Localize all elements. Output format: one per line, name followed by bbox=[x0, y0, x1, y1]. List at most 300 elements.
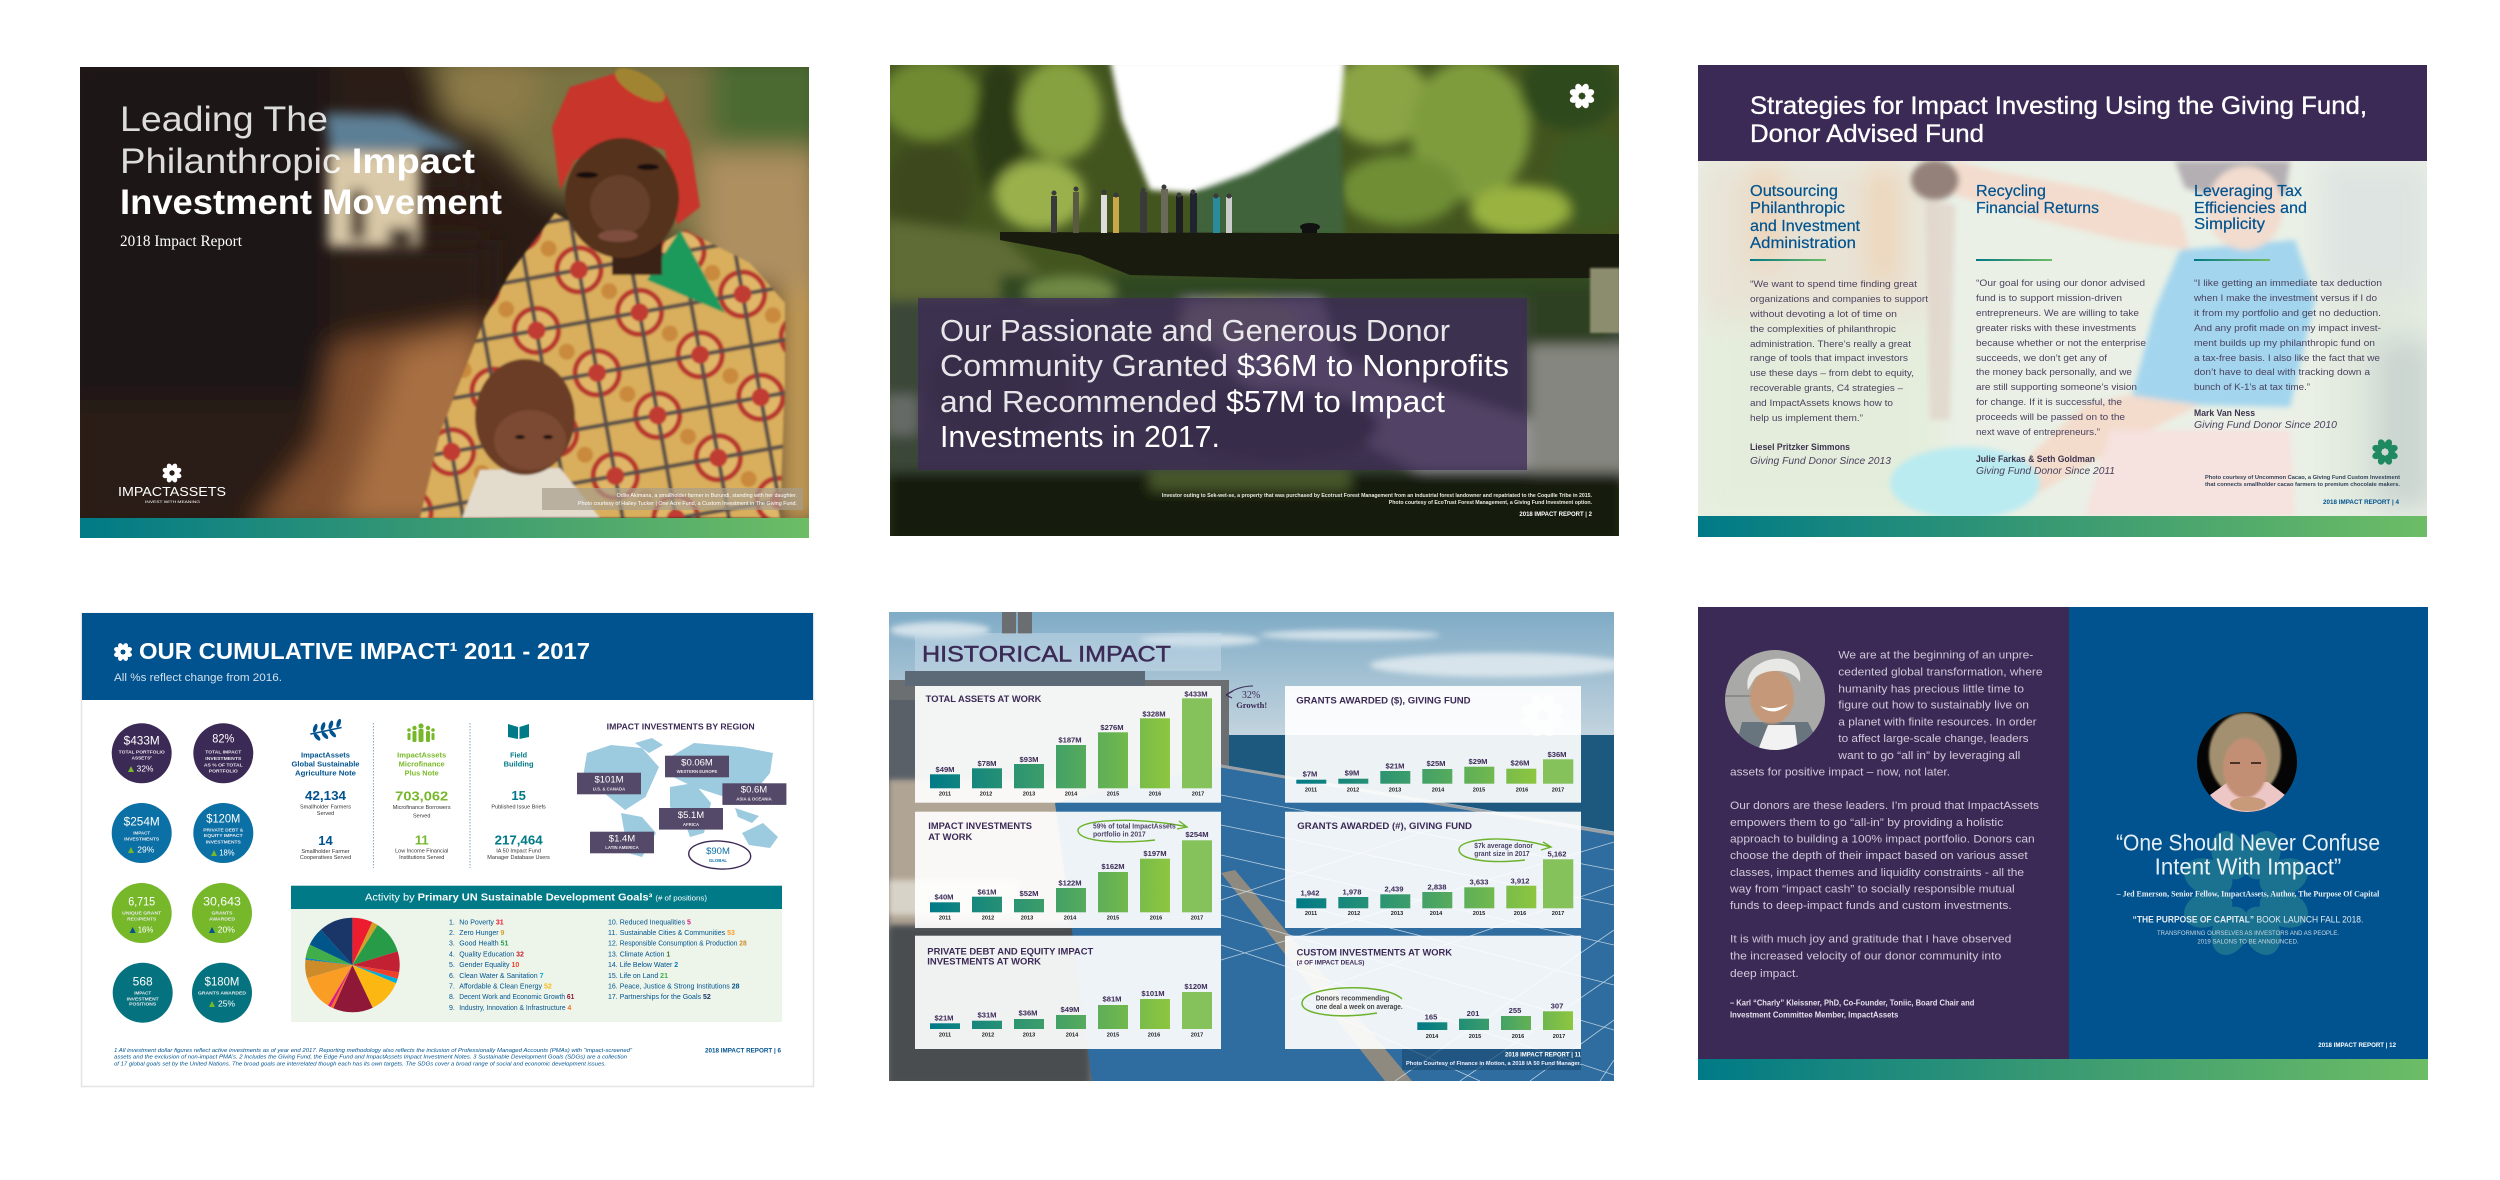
portrait: Karl Kleissner bbox=[1725, 650, 1825, 750]
chart: grants awarded count: 2,838 bbox=[1427, 882, 1447, 891]
chart: custom investments at work: 201 bbox=[1467, 1009, 1480, 1018]
chart: total assets at work bbox=[915, 686, 1221, 803]
callout: 59% of portfolio: portfolio in 2017 bbox=[1093, 832, 1146, 839]
wrap bbox=[420, 213, 785, 518]
cover title: Philanthropic Impact bbox=[120, 142, 475, 181]
region: Latin America: $1.4M bbox=[609, 834, 635, 845]
callout: 32% growth: 32% bbox=[1242, 690, 1260, 701]
letter text: funds to deep-impact funds and custom investments. bbox=[1730, 900, 2012, 912]
purple letter column bbox=[1698, 607, 2069, 1059]
chart: custom investments at work: 2014 bbox=[1426, 1034, 1439, 1040]
chart: custom investments at work: CUSTOM INVESTMENTS AT WORK bbox=[1297, 947, 1453, 957]
page title box: HISTORICAL IMPACT bbox=[922, 642, 1171, 667]
legend: goals 1 to 9: 2. bbox=[449, 930, 455, 937]
stat circle: impact investment positions: POSITIONS bbox=[129, 1002, 156, 1007]
column: outsourcing bbox=[1749, 183, 1928, 467]
footnotes bbox=[114, 1048, 633, 1067]
stat circle: private debt and equity bbox=[193, 803, 253, 863]
page number and photo credit: 2018 IMPACT REPORT | 11 bbox=[1505, 1052, 1582, 1059]
legend: goals 1 to 9 bbox=[449, 919, 574, 1012]
chart: grants awarded count: 2017 bbox=[1552, 911, 1564, 917]
legend: goals 10 to 17: 16. bbox=[608, 984, 618, 990]
letter text: a planet with finite resources. In order bbox=[1838, 716, 2037, 728]
stat circle: grants awarded count: AWARDED bbox=[209, 916, 236, 921]
column: outsourcing: range of tools that impact investors bbox=[1750, 352, 1908, 363]
chart: grants awarded dollars: 2012 bbox=[1347, 787, 1359, 793]
chart: grants awarded dollars: $29M bbox=[1468, 757, 1488, 766]
column: field building: Published Issue Briefs bbox=[491, 804, 546, 810]
chart: grants awarded count: 1,942 bbox=[1300, 888, 1320, 897]
chart: private debt and equity: $81M bbox=[1102, 995, 1122, 1004]
column: agriculture note bbox=[292, 718, 360, 861]
headline box: Our Passionate and Generous Donor bbox=[940, 313, 1450, 348]
column: recycling: entrepreneurs. We are willing to take bbox=[1976, 307, 2139, 318]
chart: grants awarded dollars: $7M bbox=[1303, 770, 1317, 779]
region: Africa: AFRICA bbox=[683, 822, 699, 827]
column: recycling: succeeds, we don’t get any of bbox=[1976, 352, 2107, 363]
chart: grants awarded dollars: $21M bbox=[1386, 761, 1404, 770]
headline box: Investments in 2017. bbox=[940, 419, 1220, 454]
chart: total assets at work: $276M bbox=[1100, 723, 1124, 732]
cover title bbox=[120, 100, 502, 222]
stat circle: unique grant recipients: RECIPIENTS bbox=[127, 916, 156, 921]
chart: impact investments at work: AT WORK bbox=[928, 832, 973, 842]
chart: grants awarded count: 2,439 bbox=[1384, 885, 1404, 894]
chart: custom investments at work: 165 bbox=[1425, 1012, 1438, 1021]
page number: 2018 IMPACT REPORT | 6 bbox=[705, 1048, 782, 1055]
forest and bridge photo bbox=[880, 50, 1630, 547]
stat circle: impact investments: IMPACT bbox=[133, 830, 150, 835]
column: leveraging tax: it from my portfolio and get no deduction. bbox=[2194, 307, 2381, 318]
column: outsourcing: organizations and companies to support bbox=[1750, 293, 1928, 304]
chart: total assets at work: TOTAL ASSETS AT WORK bbox=[926, 694, 1042, 704]
stat circle: grants awarded dollars bbox=[192, 963, 252, 1023]
chart: grants awarded dollars: 2015 bbox=[1473, 787, 1485, 793]
stat circle: grants awarded dollars: 25% bbox=[218, 1000, 235, 1009]
chart: total assets at work: 2016 bbox=[1149, 791, 1161, 797]
legend: goals 1 to 9: Decent Work and Economic Growth 61 bbox=[459, 994, 574, 1001]
chart: grants awarded count: 2014 bbox=[1430, 911, 1443, 917]
column: field building: Manager Database Users bbox=[487, 855, 550, 861]
photo caption bbox=[1162, 493, 1593, 506]
column: leveraging tax: when I make the investment versus if I do bbox=[2193, 292, 2377, 303]
chart: grants awarded dollars: $36M bbox=[1548, 750, 1566, 759]
page title box bbox=[915, 633, 1221, 671]
legend: goals 1 to 9: Affordable & Clean Energy 52 bbox=[459, 984, 552, 990]
chart: private debt and equity: 2013 bbox=[1023, 1032, 1035, 1038]
stat circle: unique grant recipients: 16% bbox=[138, 925, 153, 934]
chart: total assets at work: $187M bbox=[1058, 736, 1082, 745]
panel: strategies page bbox=[1698, 65, 2435, 537]
column: microfinance note: Microfinance Borrowers bbox=[393, 805, 451, 811]
stat circle: grants awarded dollars: $180M bbox=[205, 977, 239, 989]
chart: private debt and equity bbox=[915, 936, 1221, 1049]
chart: impact investments at work: $40M bbox=[934, 893, 954, 902]
stat circle: private debt and equity: EQUITY IMPACT bbox=[204, 833, 243, 838]
chart: total assets at work: 2015 bbox=[1107, 791, 1119, 797]
header band bbox=[1698, 65, 2427, 161]
stat circle: total portfolio assets: ASSETS² bbox=[132, 756, 152, 761]
legend: goals 1 to 9: Quality Education 32 bbox=[459, 951, 524, 958]
legend: goals 1 to 9: 3. bbox=[449, 941, 455, 948]
footnotes: 1 All investment dollar figures reflect active investments as of year end 2017. Reporting methodology also reflects the inclusion of Professionally Managed Accounts (PMAs) with “impact-screened” bbox=[114, 1048, 633, 1054]
gradient band bbox=[1698, 516, 2427, 537]
region: Global: GLOBAL bbox=[709, 858, 727, 863]
subheading: All %s reflect change from 2016. bbox=[114, 672, 282, 684]
column: field building: 15 bbox=[511, 788, 526, 803]
column: leveraging tax: don’t have to deal with tracking down a bbox=[2194, 366, 2371, 377]
chart: impact investments at work: $197M bbox=[1143, 849, 1167, 858]
chart: private debt and equity: 2015 bbox=[1107, 1032, 1119, 1038]
column: field building: 217,464 bbox=[495, 833, 543, 848]
gradient band bbox=[1698, 1059, 2428, 1080]
column: recycling: Julie Farkas & Seth Goldman bbox=[1976, 453, 2095, 464]
chart: private debt and equity: PRIVATE DEBT AND EQUITY IMPACT bbox=[927, 947, 1094, 957]
column: outsourcing: “We want to spend time finding great bbox=[1750, 278, 1917, 289]
legend: goals 10 to 17: Climate Action 1 bbox=[620, 951, 670, 958]
legend: goals 1 to 9: 6. bbox=[449, 973, 455, 980]
region: Western Europe bbox=[665, 756, 729, 777]
region: Asia and Oceania bbox=[722, 783, 786, 805]
column: outsourcing: Philanthropic bbox=[1750, 200, 1845, 217]
baby bbox=[462, 468, 600, 518]
letter text bbox=[1729, 650, 2043, 980]
page number and photo credit: Photo Courtesy of Finance in Motion, a 2018 IA 50 Fund Manager. bbox=[1406, 1061, 1582, 1067]
legend: goals 1 to 9: 8. bbox=[449, 994, 455, 1001]
chart: grants awarded dollars bbox=[1285, 686, 1581, 803]
chart: grants awarded dollars: $9M bbox=[1345, 768, 1359, 777]
stat circle: impact share: TOTAL IMPACT bbox=[205, 749, 241, 754]
region: Global bbox=[688, 839, 751, 871]
letter text: It is with much joy and gratitude that I have observed bbox=[1730, 934, 2011, 946]
column: leveraging tax: Efficiencies and bbox=[2194, 200, 2307, 217]
legend: goals 10 to 17: Peace, Justice & Strong Institutions 28 bbox=[620, 984, 740, 990]
column: outsourcing: help us implement them.” bbox=[1750, 412, 1863, 423]
letter text: the increased velocity of our donor community into bbox=[1730, 950, 2001, 962]
column: outsourcing: Liesel Pritzker Simmons bbox=[1750, 441, 1850, 452]
chart: impact investments at work: 2015 bbox=[1107, 915, 1119, 921]
blue quote column bbox=[2069, 607, 2428, 1059]
washed background photo bbox=[1698, 160, 2435, 520]
column: recycling: Recycling bbox=[1976, 183, 2046, 200]
letter text: Our donors are these leaders. I’m proud that ImpactAssets bbox=[1730, 800, 2040, 812]
book launch note: 2019 SALONS TO BE ANNOUNCED. bbox=[2197, 939, 2299, 945]
region: Africa bbox=[659, 808, 723, 830]
stat circle: unique grant recipients bbox=[112, 883, 172, 943]
icon: wheat sprig bbox=[308, 718, 345, 743]
logo: ImpactAssets bbox=[118, 463, 226, 504]
stat circle: grants awarded count bbox=[192, 883, 252, 943]
chart: grants awarded dollars: 2016 bbox=[1516, 787, 1528, 793]
chart: grants awarded dollars: 2013 bbox=[1389, 787, 1401, 793]
chart: grants awarded count: GRANTS AWARDED (#), GIVING FUND bbox=[1297, 821, 1473, 831]
letter text: We are at the beginning of an unpre- bbox=[1838, 650, 2034, 662]
page number: 2018 IMPACT REPORT | 4 bbox=[2323, 499, 2400, 506]
chart: private debt and equity: $120M bbox=[1184, 982, 1208, 991]
legend: goals 1 to 9: Gender Equality 10 bbox=[459, 962, 519, 969]
legend: goals 10 to 17: 14. bbox=[608, 962, 618, 969]
page number and photo credit bbox=[1402, 1049, 1582, 1070]
footnotes: assets and the exclusion of non-impact PMA’s. 2 Includes the Giving Fund, the Edge Fund and ImpactAssets Impact Investment Notes. 3 Sustainable Development Goals (SDGs) are a collection bbox=[114, 1055, 627, 1061]
stat circle: impact share: INVESTMENTS bbox=[205, 756, 241, 761]
column: leveraging tax: Leveraging Tax bbox=[2194, 183, 2302, 200]
letter text: classes, impact themes and liquidity constraints - all the bbox=[1730, 867, 2024, 879]
SDG heading: Activity by Primary UN Sustainable Development Goals³ (# of positions) bbox=[365, 892, 708, 904]
logo flower bbox=[1569, 83, 1595, 109]
heading: Donor Advised Fund bbox=[1750, 120, 1984, 148]
legend: goals 1 to 9: Good Health 51 bbox=[459, 941, 508, 948]
column: leveraging tax: Simplicity bbox=[2194, 216, 2265, 233]
chart: grants awarded count: 2011 bbox=[1305, 911, 1317, 917]
chart: grants awarded dollars: GRANTS AWARDED ($), GIVING FUND bbox=[1296, 695, 1471, 705]
column: leveraging tax: Giving Fund Donor Since 2010 bbox=[2194, 419, 2337, 431]
callout: 32% growth bbox=[1226, 686, 1267, 710]
stat circle: impact share: AS % OF TOTAL bbox=[204, 762, 243, 767]
column: microfinance note: Institutions Served bbox=[399, 855, 444, 861]
headline box bbox=[918, 298, 1527, 470]
legend: goals 1 to 9: 9. bbox=[449, 1005, 455, 1012]
page number: 2018 IMPACT REPORT | 12 bbox=[2318, 1042, 2397, 1049]
cover title: Leading The bbox=[120, 100, 328, 139]
chart: impact investments at work: 2017 bbox=[1191, 915, 1203, 921]
signature: – Karl “Charly” Kleissner, PhD, Co-Founder, Toniic, Board Chair and bbox=[1730, 998, 1974, 1008]
pie chart bbox=[305, 918, 400, 1012]
chart: private debt and equity: 2017 bbox=[1191, 1032, 1203, 1038]
chart: custom investments at work: 2015 bbox=[1469, 1034, 1481, 1040]
region: Asia and Oceania: $0.6M bbox=[741, 785, 767, 796]
panel: letter and quote page bbox=[1698, 607, 2428, 1080]
chart: total assets at work: 2013 bbox=[1023, 791, 1035, 797]
legend: goals 1 to 9: Zero Hunger 9 bbox=[459, 930, 505, 937]
legend: goals 10 to 17: 10. bbox=[608, 919, 618, 926]
photo caption bbox=[2205, 475, 2401, 488]
stat circle: grants awarded dollars: GRANTS AWARDED bbox=[198, 990, 247, 995]
icon: open book bbox=[508, 724, 518, 739]
column: recycling: fund is to support mission-driven bbox=[1976, 292, 2122, 303]
column: agriculture note: Cooperatives Served bbox=[300, 855, 351, 861]
letter text: way from “impact cash” to socially responsible mutual bbox=[1729, 884, 2015, 896]
letter text: choose the depth of their impact based on various asset bbox=[1730, 850, 2028, 862]
column: leveraging tax: a tax-free basis. I also like the fact that we bbox=[2194, 352, 2380, 363]
solar panel photo bbox=[889, 612, 1630, 1085]
column: outsourcing: use these days – from debt to equity, bbox=[1750, 367, 1914, 378]
page number: 2018 IMPACT REPORT | 2 bbox=[1519, 512, 1593, 518]
legend: goals 10 to 17: 12. bbox=[608, 941, 618, 948]
chart: grants awarded dollars: $25M bbox=[1426, 759, 1446, 768]
callout: one deal a week bbox=[1302, 988, 1403, 1016]
chart: impact investments at work: 2013 bbox=[1021, 915, 1033, 921]
map: impact investments by region bbox=[577, 722, 786, 871]
photo caption bbox=[542, 488, 803, 510]
column: outsourcing: recoverable grants, C4 strategies – bbox=[1750, 382, 1904, 393]
region: Latin America: LATIN AMERICA bbox=[605, 845, 639, 850]
map: impact investments by region: IMPACT INVESTMENTS BY REGION bbox=[607, 722, 755, 731]
stat circle: grants awarded count: 30,643 bbox=[203, 897, 241, 909]
callout: one deal a week: Donors recommending bbox=[1316, 994, 1390, 1003]
column: agriculture note: Smallholder Farmer bbox=[301, 849, 350, 855]
chart: grants awarded count: 1,978 bbox=[1342, 888, 1362, 897]
icon: people bbox=[407, 723, 435, 742]
chart: impact investments at work: 2016 bbox=[1150, 915, 1162, 921]
chart: private debt and equity: INVESTMENTS AT WORK bbox=[927, 957, 1042, 967]
stat circle: private debt and equity: INVESTMENTS bbox=[206, 839, 241, 844]
attribution: – Jed Emerson, Senior Fellow, ImpactAssets, Author, The Purpose Of Capital bbox=[2116, 888, 2380, 898]
chart: grants awarded dollars: 2017 bbox=[1552, 787, 1564, 793]
column: agriculture note: 42,134 bbox=[305, 788, 347, 803]
stat circle: impact investments: $254M bbox=[124, 817, 160, 829]
cover subtitle: 2018 Impact Report bbox=[120, 233, 243, 250]
chart: grants awarded dollars: 2014 bbox=[1432, 787, 1445, 793]
column: recycling: the money back personally, and we bbox=[1976, 366, 2132, 377]
legend: goals 10 to 17: 11. bbox=[608, 930, 617, 937]
stat circle: grants awarded count: GRANTS bbox=[212, 911, 232, 916]
legend: goals 1 to 9: 4. bbox=[449, 951, 455, 958]
quote bbox=[2116, 830, 2380, 879]
photo caption: Photo courtesy of Uncommon Cacao, a Giving Fund Custom Investment bbox=[2205, 475, 2400, 481]
heading: Strategies for Impact Investing Using the Giving Fund, bbox=[1750, 92, 2367, 120]
legend: goals 10 to 17: Reduced Inequalities 5 bbox=[620, 919, 691, 926]
column: outsourcing: administration. There’s really a great bbox=[1750, 338, 1911, 349]
column: leveraging tax: And any profit made on my impact invest- bbox=[2194, 322, 2381, 333]
chart: total assets at work: 2014 bbox=[1065, 791, 1078, 797]
column: agriculture note: 14 bbox=[318, 833, 333, 848]
chart: grants awarded dollars: $26M bbox=[1510, 759, 1530, 768]
chart: impact investments at work: 2014 bbox=[1064, 915, 1077, 921]
people on bridge bbox=[1051, 184, 1320, 233]
legend: goals 10 to 17: 13. bbox=[608, 951, 618, 958]
chart: total assets at work: $433M bbox=[1184, 689, 1208, 698]
stat circle: impact investments: 29% bbox=[137, 845, 154, 854]
chart: private debt and equity: $21M bbox=[934, 1014, 954, 1023]
chart: impact investments at work bbox=[915, 812, 1221, 928]
chart: total assets at work: 2017 bbox=[1192, 791, 1204, 797]
column: agriculture note: Agriculture Note bbox=[295, 770, 356, 777]
letter text: to affect large-scale change, leaders bbox=[1838, 733, 2029, 745]
chart: private debt and equity: $31M bbox=[978, 1011, 996, 1020]
chart: total assets at work: $93M bbox=[1020, 755, 1038, 764]
chart: grants awarded count: 3,912 bbox=[1510, 876, 1530, 885]
chart: grants awarded count: 2012 bbox=[1348, 911, 1360, 917]
legend: goals 10 to 17: Responsible Consumption & Production 28 bbox=[620, 941, 747, 948]
panel: cover page bbox=[60, 50, 830, 540]
heading: OUR CUMULATIVE IMPACT¹ 2011 - 2017 bbox=[139, 638, 590, 664]
column: leveraging tax: bunch of K-1’s at tax time.” bbox=[2194, 381, 2310, 392]
column: recycling: are still supporting someone’s vision bbox=[1976, 381, 2137, 392]
header band bbox=[82, 613, 813, 700]
stat circle: impact investment positions: 568 bbox=[133, 977, 153, 989]
column: recycling: next wave of entrepreneurs.” bbox=[1976, 426, 2100, 437]
column: microfinance note: 11 bbox=[415, 833, 429, 848]
panel: cumulative impact page bbox=[82, 613, 814, 1086]
legend: goals 1 to 9: No Poverty 31 bbox=[459, 919, 504, 926]
legend: goals 10 to 17: Partnerships for the Goals 52 bbox=[620, 994, 711, 1001]
column: microfinance note: ImpactAssets bbox=[397, 753, 446, 760]
legend: goals 10 to 17 bbox=[608, 919, 747, 1001]
stat circle: impact investments: INVESTMENTS bbox=[124, 836, 159, 841]
letter text: assets for positive impact – now, not later. bbox=[1730, 767, 1950, 779]
headline box: Community Granted $36M to Nonprofits bbox=[940, 348, 1509, 383]
chart: impact investments at work: $61M bbox=[978, 887, 996, 896]
column: outsourcing: Outsourcing bbox=[1750, 183, 1838, 200]
column: microfinance note: 703,062 bbox=[395, 788, 448, 803]
book launch note: TRANSFORMING OURSELVES AS INVESTORS AND AS PEOPLE. bbox=[2157, 931, 2339, 937]
column: recycling: proceeds will be passed on to the bbox=[1976, 411, 2125, 422]
region: Western Europe: WESTERN EUROPE bbox=[677, 769, 718, 774]
chart: custom investments at work: 2017 bbox=[1553, 1034, 1565, 1040]
column: microfinance note: Served bbox=[413, 813, 430, 819]
callout: average donor grant bbox=[1459, 839, 1551, 862]
chart: custom investments at work: 2016 bbox=[1512, 1034, 1524, 1040]
stat circle: total portfolio assets: $433M bbox=[124, 736, 160, 748]
column: recycling bbox=[1976, 183, 2146, 477]
column: agriculture note: ImpactAssets bbox=[301, 753, 350, 760]
chart: total assets at work: $328M bbox=[1142, 709, 1166, 718]
letter text: empowers them to go “all-in” by providing a holistic bbox=[1730, 817, 2004, 829]
chart: impact investments at work: 2011 bbox=[939, 915, 951, 921]
logo: ImpactAssets: INVEST WITH MEANING bbox=[145, 500, 201, 504]
legend: goals 1 to 9: Clean Water & Sanitation 7 bbox=[459, 973, 544, 980]
chart: grants awarded dollars: 2011 bbox=[1305, 787, 1317, 793]
stat circle: grants awarded count: 20% bbox=[218, 925, 235, 934]
column: field building: IA 50 Impact Fund bbox=[496, 849, 541, 855]
column: recycling: “Our goal for using our donor advised bbox=[1976, 277, 2145, 288]
chart: impact investments at work: 2012 bbox=[982, 915, 994, 921]
callout: average donor grant: $7k average donor bbox=[1474, 843, 1533, 850]
photo caption: Odile Akimana, a smallholder farmer in Burundi, standing with her daughter. bbox=[617, 493, 797, 499]
column: recycling: Financial Returns bbox=[1976, 200, 2099, 217]
book launch note: “THE PURPOSE OF CAPITAL” BOOK LAUNCH FALL 2018. bbox=[2133, 914, 2363, 924]
column: outsourcing: without devoting a lot of time on bbox=[1749, 308, 1897, 319]
gradient band bbox=[80, 518, 809, 538]
stat circle: private debt and equity: 18% bbox=[219, 848, 235, 857]
letter text: cedented global transformation, where bbox=[1838, 666, 2043, 678]
chart: impact investments at work: $162M bbox=[1101, 862, 1125, 871]
stat circle: total portfolio assets: TOTAL PORTFOLIO bbox=[119, 750, 165, 755]
quote: “One Should Never Confuse bbox=[2116, 830, 2380, 856]
stat circle: total portfolio assets: 32% bbox=[137, 765, 153, 774]
chart: grants awarded count: 3,633 bbox=[1469, 877, 1489, 886]
chart: impact investments at work: $52M bbox=[1020, 889, 1038, 898]
column: outsourcing: and Investment bbox=[1750, 218, 1861, 235]
chart: custom investments at work: 307 bbox=[1551, 1002, 1563, 1011]
legend: goals 10 to 17: 17. bbox=[608, 994, 618, 1001]
signature bbox=[1730, 998, 1974, 1019]
legend: goals 1 to 9: Industry, Innovation & Infrastructure 4 bbox=[459, 1005, 571, 1012]
column: agriculture note: Served bbox=[317, 811, 334, 817]
region: U.S. and Canada: $101M bbox=[594, 775, 624, 786]
callout: 59% of portfolio: 59% of total ImpactAssets bbox=[1093, 824, 1176, 831]
photo caption: Investor outing to Sek-wet-se, a property that was purchased by Ecotrust Forest Management from an industrial forest landowner and repatriated to the Coquille Tribe in 2015. bbox=[1162, 493, 1593, 499]
photo caption: Photo courtesy of EcoTrust Forest Management, a Giving Fund Investment option. bbox=[1389, 500, 1593, 506]
column: agriculture note: Smallholder Farmers bbox=[300, 804, 351, 810]
column: leveraging tax: Mark Van Ness bbox=[2194, 407, 2255, 418]
stat circle: impact share: 82% bbox=[212, 734, 234, 746]
callout: 59% of portfolio bbox=[1078, 820, 1187, 842]
chart: private debt and equity: $36M bbox=[1018, 1009, 1038, 1018]
region: U.S. and Canada bbox=[577, 773, 641, 794]
chart: private debt and equity: 2012 bbox=[982, 1032, 994, 1038]
letter text: deep impact. bbox=[1730, 968, 1799, 980]
chart: private debt and equity: 2014 bbox=[1066, 1032, 1079, 1038]
headline box: and Recommended $57M to Impact bbox=[940, 384, 1445, 419]
column: leveraging tax: ment builds up my philanthropic fund on bbox=[2194, 337, 2375, 348]
region: Asia and Oceania: ASIA & OCEANIA bbox=[736, 796, 772, 801]
letter text: humanity has precious little time to bbox=[1838, 683, 2024, 695]
column: leveraging tax: “I like getting an immediate tax deduction bbox=[2194, 277, 2382, 288]
column: recycling: for change. If it is successful, the bbox=[1976, 396, 2122, 407]
callout: one deal a week: one deal a week on average. bbox=[1316, 1002, 1403, 1011]
column: microfinance note: Low Income Financial bbox=[395, 849, 448, 855]
